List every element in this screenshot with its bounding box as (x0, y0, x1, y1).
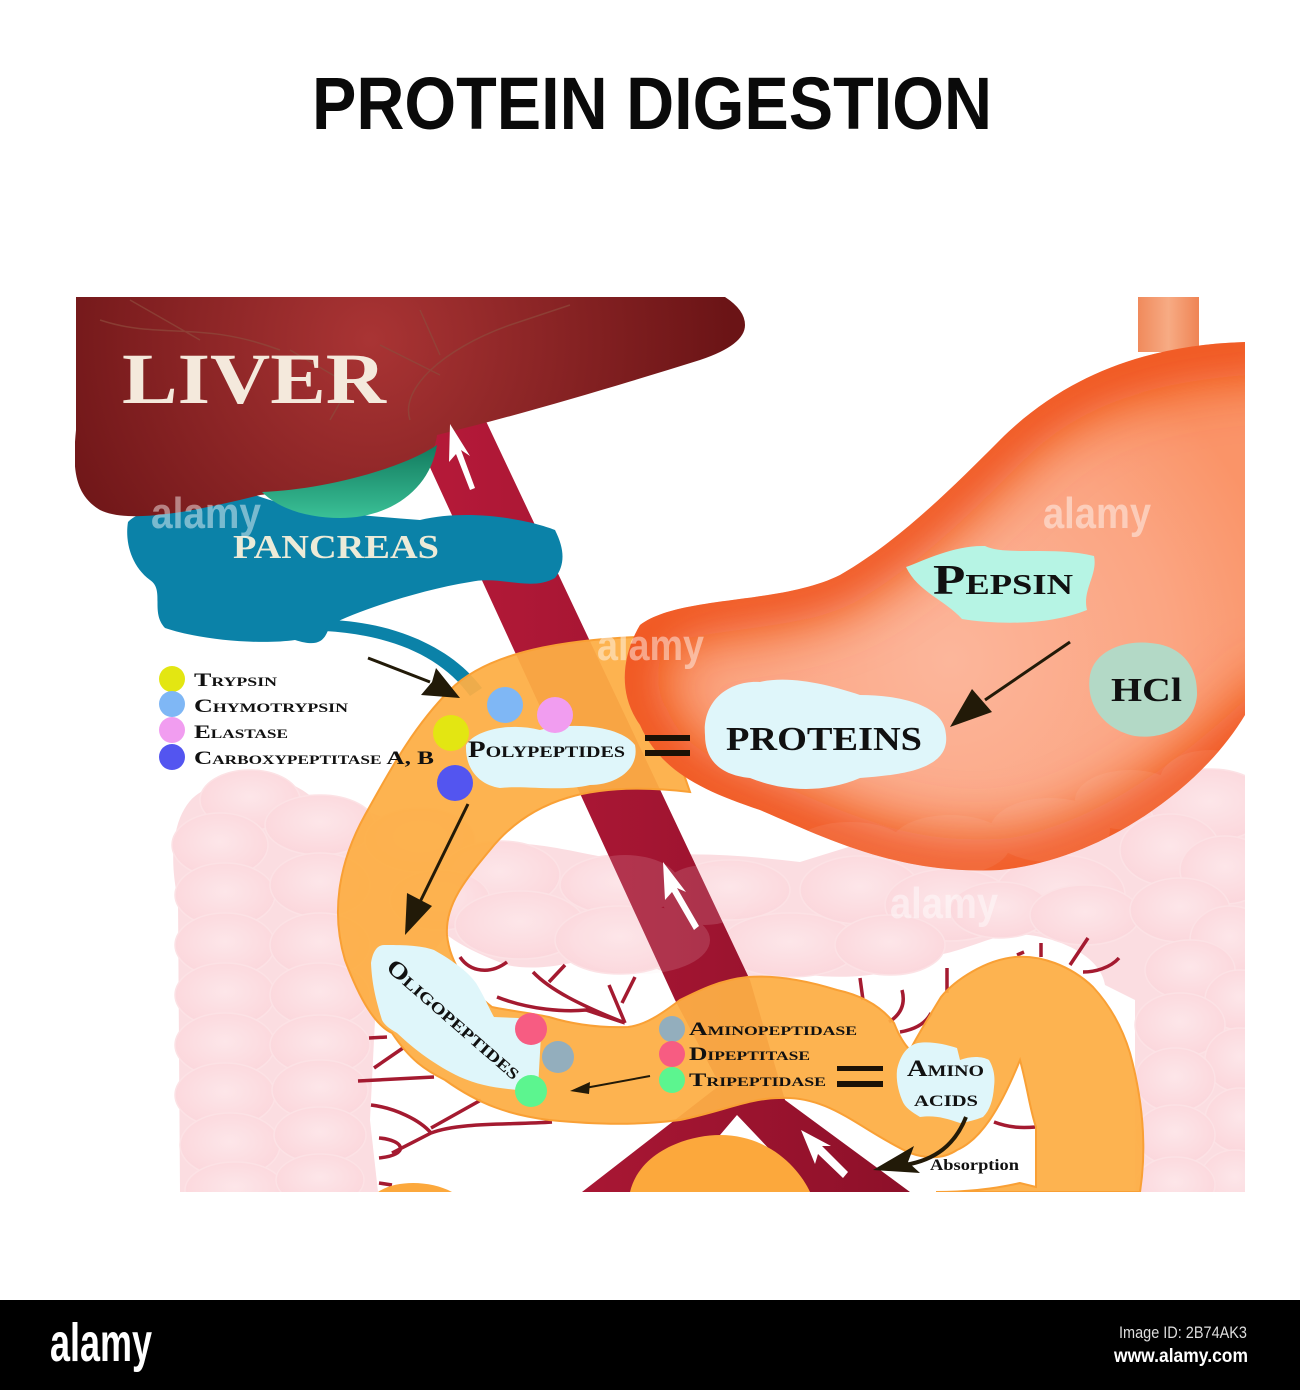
title: PROTEIN DIGESTION (312, 62, 992, 145)
polypeptides label: Polypeptides (468, 737, 625, 762)
arrow: tripeptidase to oligopeptides (570, 1076, 650, 1094)
small intestine (338, 637, 1143, 1192)
image id: Image ID: 2B74AK3 (1119, 1323, 1247, 1342)
legend: pancreatic enzymes: Carboxypeptitase A, B (194, 748, 434, 769)
HCl label: HCl (1111, 672, 1182, 709)
watermarks: alamy (890, 879, 998, 928)
HCl blob (1089, 642, 1197, 737)
anatomy diagram (75, 297, 1300, 1218)
equals sign: polypeptides (645, 735, 690, 756)
esophagus (1138, 297, 1199, 352)
pepsin blob (906, 546, 1095, 623)
legend: pancreatic enzymes: Chymotrypsin (194, 696, 349, 717)
legend: intestinal enzymes (659, 1016, 857, 1093)
stomach (625, 342, 1300, 878)
pancreatic enzyme dots (433, 687, 573, 801)
intestinal enzyme dots (515, 1013, 574, 1107)
artery (399, 400, 910, 1192)
pancreas label: PANCREAS (233, 529, 439, 566)
watermarks (151, 489, 1151, 928)
watermarks: alamy (597, 621, 704, 670)
liver veins (100, 300, 570, 420)
arrow: to oligopeptides (405, 804, 468, 935)
watermarks: alamy (151, 489, 261, 538)
amino acids label: Amino (907, 1056, 984, 1081)
legend: intestinal enzymes: Dipeptitase (689, 1044, 810, 1065)
legend: pancreatic enzymes: Trypsin (194, 670, 278, 691)
footer bar (0, 1300, 1300, 1390)
liver (75, 297, 745, 516)
amino acids blob (897, 1042, 994, 1123)
gallbladder (262, 445, 437, 518)
legend: pancreatic enzymes: Elastase (194, 722, 288, 743)
large intestine over artery (609, 855, 723, 972)
legend: intestinal enzymes: Tripeptidase (689, 1070, 826, 1091)
legend: intestinal enzymes: Aminopeptidase (689, 1019, 857, 1040)
absorption label: Absorption (930, 1157, 1019, 1174)
arrows in artery (449, 424, 848, 1178)
amino acids label: acids (914, 1086, 978, 1111)
pancreas (127, 495, 562, 696)
oligopeptides blob (371, 945, 541, 1090)
amino acids label (907, 1056, 984, 1111)
legend: pancreatic enzymes (159, 666, 434, 770)
equals sign: amino acids (837, 1066, 883, 1087)
proteins label: PROTEINS (726, 721, 922, 758)
liver label: LIVER (122, 339, 387, 419)
pepsin label: Pepsin (933, 558, 1073, 604)
watermarks: alamy (1043, 489, 1151, 538)
large intestine (172, 769, 1275, 1218)
arrow: pepsin to proteins (950, 642, 1070, 727)
lower intestine loops (378, 1135, 810, 1192)
footer logo: alamy (50, 1313, 152, 1373)
arrow: pancreas to duodenum (368, 658, 460, 698)
website: www.alamy.com (1113, 1346, 1248, 1367)
oligopeptides label: Oligopeptides (382, 954, 527, 1084)
proteins blob (705, 680, 946, 789)
arrow: absorption (873, 1117, 966, 1173)
polypeptides blob (466, 726, 636, 788)
mesenteric blood vessels (358, 938, 1119, 1185)
